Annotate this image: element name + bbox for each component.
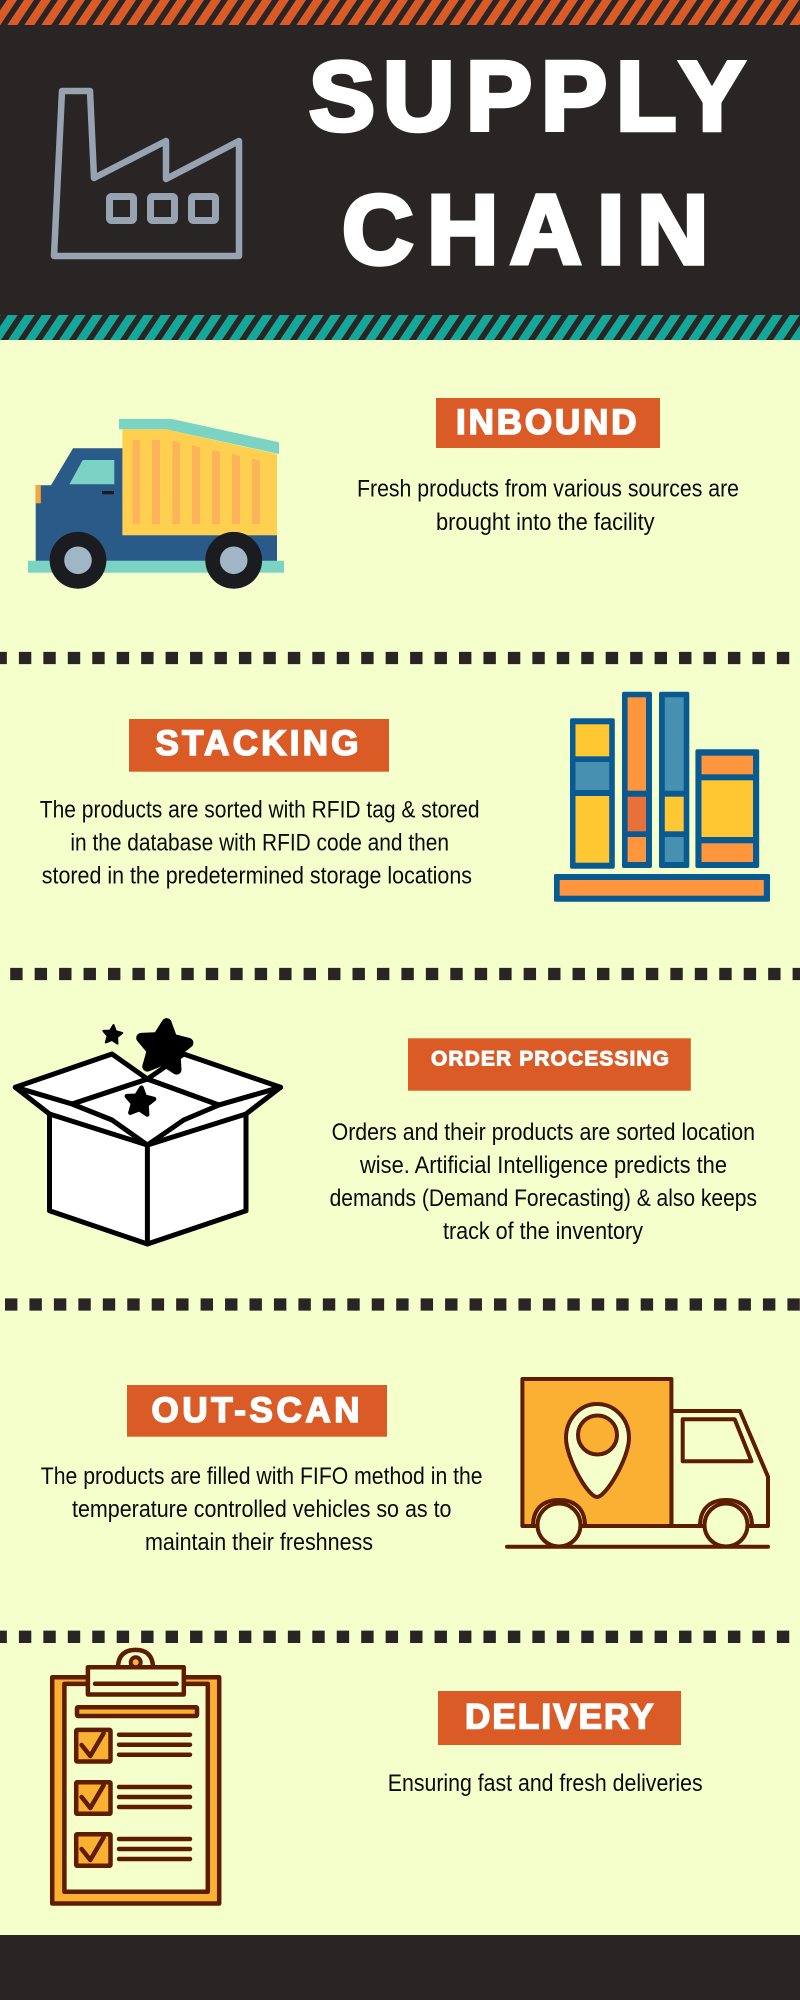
text: stacking xyxy=(40,797,480,890)
text: inbound: brought into the facility xyxy=(436,509,655,536)
text: stacking: stored in the predetermined storage locations xyxy=(42,863,472,890)
title: CHAIN xyxy=(342,175,708,284)
header panel xyxy=(0,0,800,340)
heading: delivery xyxy=(438,1691,681,1745)
heading: out-scan xyxy=(127,1385,387,1437)
heading: order processing: ORDER PROCESSING xyxy=(431,1048,669,1070)
text: out-scan xyxy=(41,1463,483,1556)
text: order processing: track of the inventory xyxy=(443,1218,643,1245)
heading: out-scan: OUT-SCAN xyxy=(152,1391,360,1430)
panel: out-scan xyxy=(41,1379,768,1556)
text: order processing: wise. Artificial Intelligence predicts the xyxy=(359,1152,727,1179)
panel: delivery xyxy=(52,1650,703,1904)
separator 4 xyxy=(0,1631,800,1643)
heading: inbound: INBOUND xyxy=(456,403,636,442)
panel: inbound xyxy=(28,398,739,589)
text: out-scan: temperature controlled vehicles so as to xyxy=(72,1496,452,1523)
separator 1 xyxy=(0,652,800,664)
heading: delivery: DELIVERY xyxy=(465,1698,654,1736)
heading: order processing xyxy=(408,1038,691,1091)
heading: stacking xyxy=(129,719,389,772)
text: inbound: Fresh products from various sources are xyxy=(357,476,739,503)
title xyxy=(309,41,745,284)
panel: stacking xyxy=(40,692,770,902)
text: inbound xyxy=(357,476,739,536)
heading: stacking: STACKING xyxy=(156,724,358,763)
title: SUPPLY xyxy=(309,41,745,151)
separator 2 xyxy=(10,968,800,980)
text: out-scan: The products are filled with FIFO method in the xyxy=(41,1463,483,1490)
text: stacking: The products are sorted with RFID tag & stored xyxy=(40,797,480,824)
heading: inbound xyxy=(436,398,660,448)
icon: delivery van with location pin xyxy=(507,1379,768,1547)
text: delivery: Ensuring fast and fresh deliveries xyxy=(388,1770,703,1797)
text: out-scan: maintain their freshness xyxy=(145,1529,373,1556)
icon: clipboard checklist xyxy=(52,1650,219,1904)
icon: dump truck xyxy=(28,419,284,589)
icon: open box with stars xyxy=(15,1021,281,1244)
icon: factory xyxy=(54,91,239,256)
text: order processing xyxy=(330,1119,757,1245)
separator 3 xyxy=(5,1298,800,1311)
footer band xyxy=(0,1935,800,2000)
text: stacking: in the database with RFID code and then xyxy=(70,830,449,857)
icon: books on shelf xyxy=(554,692,770,902)
text: order processing: Orders and their products are sorted location xyxy=(332,1119,755,1146)
panel: order processing xyxy=(15,1021,757,1245)
